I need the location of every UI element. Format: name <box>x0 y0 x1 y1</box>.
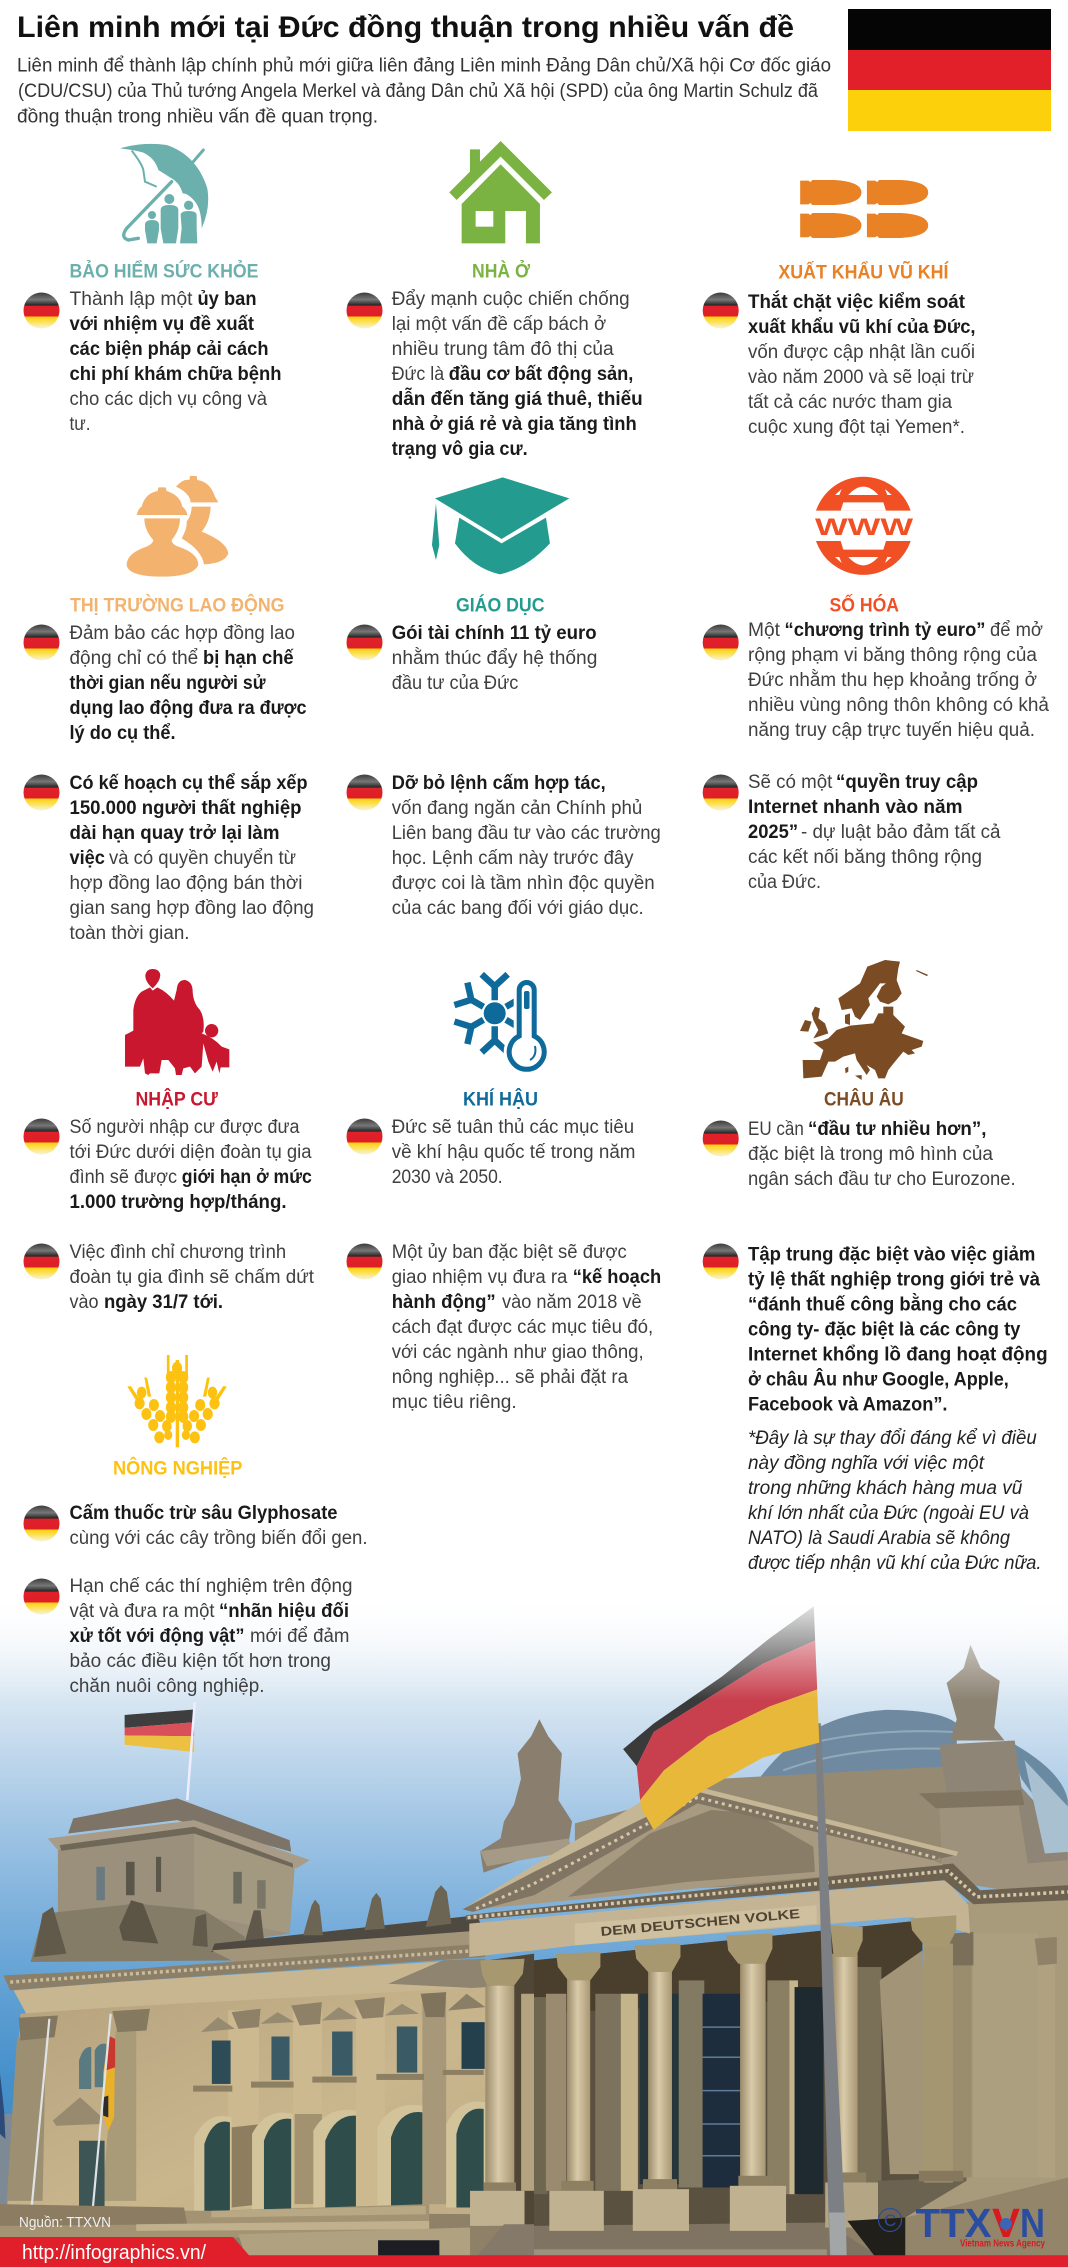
left tower and wing <box>0 1798 534 2256</box>
panel: housing <box>346 141 643 460</box>
icon: family silhouette <box>125 969 229 1075</box>
title: Liên minh mới tại Đức đồng thuận trong nhiều vấn đề <box>17 11 794 44</box>
text block: Cấm thuốc trừ sâu Glyphosate <box>70 1503 338 1524</box>
text block: thời gian nếu người sử <box>70 673 266 694</box>
icon: flag bullet <box>346 1118 382 1154</box>
text block <box>70 1503 368 1549</box>
text block <box>392 773 661 919</box>
footer bar: http://infographics.vn/ <box>22 2242 206 2264</box>
text block <box>748 772 1001 893</box>
bullet item <box>24 623 307 744</box>
icon: flag bullet <box>703 774 739 810</box>
text block: Đức nhằm thu hẹp khoảng trống ở <box>748 669 1037 691</box>
text block: nông nghiệp... sẽ phải đặt ra <box>392 1367 628 1388</box>
text block: 150.000 người thất nghiệp <box>70 798 302 819</box>
text block: “đánh thuế công bằng cho các <box>748 1294 1017 1316</box>
text block: ở châu Âu như Google, Apple, <box>748 1368 1009 1390</box>
text block: dẫn đến tăng giá thuê, thiếu <box>392 388 643 410</box>
footnote: khí lớn nhất của Đức (ngoài EU và <box>748 1503 1029 1524</box>
text block: Sẽ có một <box>748 772 833 793</box>
text block: ngân sách đầu tư cho Eurozone. <box>748 1169 1016 1190</box>
source: Nguồn: TTXVN <box>19 2214 111 2231</box>
text block: “chương trình tỷ euro” <box>784 620 986 641</box>
text block: Internet nhanh vào năm <box>748 797 962 818</box>
icon: graduation cap <box>432 477 569 574</box>
text block: hợp đồng lao động bán thời <box>70 873 302 894</box>
text block <box>392 289 643 460</box>
heading: NHẬP CƯ <box>136 1088 218 1110</box>
panel: climate <box>346 974 661 1413</box>
text block: tới Đức dưới diện đoàn tụ gia <box>70 1142 312 1163</box>
heading: THỊ TRƯỜNG LAO ĐỘNG <box>70 594 284 616</box>
icon: workers <box>127 476 228 577</box>
text block: chi phí khám chữa bệnh <box>70 364 282 385</box>
logo: TTXVN <box>878 2200 1045 2250</box>
bullet item <box>703 1244 1048 1416</box>
text block <box>70 772 314 944</box>
logo: TTXVN: TTX <box>916 2200 992 2246</box>
text block <box>392 623 597 694</box>
icon: flag bullet <box>703 292 739 328</box>
bullet item <box>24 772 314 944</box>
text block: Một <box>748 620 781 641</box>
icon: www globe <box>815 477 913 575</box>
text block: đình sẽ được <box>70 1167 177 1188</box>
logo: TTXVN: C <box>884 2211 896 2230</box>
panel: agriculture <box>24 1355 368 1697</box>
icon: flag bullet <box>24 774 60 810</box>
text block: đầu cơ bất động sản, <box>449 364 633 385</box>
text block: công ty- đặc biệt là các công ty <box>748 1320 1021 1340</box>
text block: Internet khổng lồ đang hoạt động <box>748 1344 1048 1366</box>
text block: xuất khẩu vũ khí của Đức, <box>748 317 976 338</box>
icon: flag bullet <box>24 1578 60 1614</box>
panel: immigration <box>24 969 315 1313</box>
text block: 2030 và 2050. <box>392 1167 503 1188</box>
icon: bullets <box>800 180 928 238</box>
text block: 1.000 trường hợp/tháng. <box>70 1192 286 1213</box>
text block <box>748 620 1049 741</box>
footnote: trong những khách hàng mua vũ <box>748 1478 1023 1499</box>
text block: bị hạn chế <box>203 648 294 669</box>
text block: Facebook và Amazon”. <box>748 1394 948 1416</box>
text block: để mở <box>990 620 1043 641</box>
text block: Dỡ bỏ lệnh cấm hợp tác, <box>392 773 606 794</box>
text block: Tập trung đặc biệt vào việc giảm <box>748 1244 1035 1266</box>
heading: KHÍ HẬU <box>463 1088 538 1110</box>
text block: dụng lao động đưa ra được <box>70 698 307 719</box>
background photo: Reichstag building <box>0 1590 1068 2267</box>
text block: lý do cụ thể. <box>70 723 176 744</box>
icon: wheat <box>127 1355 227 1447</box>
text block: Một ủy ban đặc biệt sẽ được <box>392 1242 627 1263</box>
bullet item <box>703 1119 1016 1190</box>
icon: snowflake and thermometer <box>454 974 544 1069</box>
bullet item <box>346 289 643 460</box>
text block: bảo các điều kiện tốt hơn trong <box>70 1651 331 1672</box>
text block: hành động” <box>392 1292 496 1313</box>
icon: flag bullet <box>24 1506 60 1542</box>
heading: NHÀ Ở <box>472 260 531 282</box>
text block: Đức sẽ tuân thủ các mục tiêu <box>392 1117 634 1138</box>
footnote: được tiếp nhận vũ khí của Đức nữa. <box>748 1553 1042 1574</box>
footnote: *Đây là sự thay đổi đáng kể vì điều <box>748 1428 1037 1449</box>
text block <box>748 1119 1016 1190</box>
text block: tư. <box>70 414 90 435</box>
text block: của Đức. <box>748 872 821 893</box>
bullet item <box>346 773 661 919</box>
bullet item <box>346 1117 636 1188</box>
bullet item <box>346 1242 661 1413</box>
text block: của các bang đối với giáo dục. <box>392 898 644 919</box>
panel: health insurance <box>24 144 282 435</box>
text block: “kế hoạch <box>573 1267 661 1288</box>
text block: và có quyền chuyển từ <box>109 848 296 869</box>
intro paragraph <box>17 56 831 128</box>
icon: www globe: WWW <box>815 514 913 541</box>
heading: NÔNG NGHIỆP <box>113 1458 243 1480</box>
flags <box>125 1606 819 1830</box>
text block: Việc đình chỉ chương trình <box>70 1242 286 1263</box>
text block: với nhiệm vụ đề xuất <box>70 314 255 335</box>
text block: ủy ban <box>198 289 256 310</box>
text block: về khí hậu quốc tế trong năm <box>392 1142 636 1163</box>
text block: nhiều vùng nông thôn không có khả <box>748 695 1049 716</box>
text block: đặc biệt là trong mô hình của <box>748 1144 993 1165</box>
intro paragraph: Liên minh để thành lập chính phủ mới giữa liên đảng Liên minh Đảng Dân chủ/Xã hội Cơ đốc giáo <box>17 56 831 76</box>
panel: arms exports <box>703 180 976 438</box>
text block: mục tiêu riêng. <box>392 1392 517 1413</box>
text block: Hạn chế các thí nghiệm trên động <box>70 1576 352 1597</box>
text block: Đảm bảo các hợp đồng lao <box>70 623 295 644</box>
text block: nhằm thúc đẩy hệ thống <box>392 647 597 669</box>
footer bar <box>0 2237 1068 2267</box>
bullet item <box>24 1503 368 1549</box>
bullet item <box>703 620 1049 741</box>
text block <box>70 1242 315 1313</box>
icon: flag bullet <box>346 774 382 810</box>
bullet item <box>346 623 597 694</box>
text block: động chỉ có thể <box>70 648 198 669</box>
icon: flag bullet <box>346 624 382 660</box>
text block: tỷ lệ thất nghiệp trong giới trẻ và <box>748 1270 1040 1290</box>
heading: CHÂU ÂU <box>824 1088 904 1110</box>
text block: được coi là tầm nhìn độc quyền <box>392 873 655 894</box>
text block: xử tốt với động vật” <box>70 1626 244 1647</box>
text block <box>70 1117 312 1213</box>
text block <box>748 291 976 438</box>
footnote: này đồng nghĩa với việc một <box>748 1453 985 1474</box>
inscription on the building: DEM DEUTSCHEN VOLKE <box>600 1906 801 1939</box>
text block: Thắt chặt việc kiểm soát <box>748 291 966 313</box>
text block: - dự luật bảo đảm tất cả <box>801 822 1001 843</box>
bullet item <box>24 1576 352 1697</box>
text block: cuộc xung đột tại Yemen*. <box>748 417 965 438</box>
text block: năng truy cập trực tuyến hiệu quả. <box>748 720 1035 741</box>
text block: Đẩy mạnh cuộc chiến chống <box>392 289 630 310</box>
logo: TTXVN: Vietnam News Agency <box>960 2238 1045 2250</box>
text block: “quyền truy cập <box>836 772 978 793</box>
icon: flag bullet <box>703 1244 739 1280</box>
icon: flag bullet <box>703 1120 739 1156</box>
bullet item <box>24 1117 312 1213</box>
text block: Đức là <box>392 364 444 385</box>
text block: cho các dịch vụ công và <box>70 389 267 410</box>
text block <box>392 1117 636 1188</box>
panel: Europe <box>703 960 1048 1574</box>
text block: Gói tài chính 11 tỷ euro <box>392 623 597 644</box>
panel: education <box>346 477 661 919</box>
dome, turrets <box>480 1645 1068 1873</box>
text block <box>748 1244 1048 1416</box>
text block: “đầu tư nhiều hơn”, <box>808 1119 986 1140</box>
portico <box>462 1723 1068 2256</box>
text block: học. Lệnh cấm này trước đây <box>392 848 634 869</box>
text block: đầu tư của Đức <box>392 673 518 694</box>
text block: Thành lập một <box>70 289 193 310</box>
icon: flag bullet <box>346 1244 382 1280</box>
text block: giới hạn ở mức <box>182 1167 312 1188</box>
icon: umbrella and family <box>120 144 208 243</box>
text block: EU cần <box>748 1119 804 1140</box>
stone base behind the lower building <box>0 2205 1068 2256</box>
text block: rộng phạm vi băng thông rộng của <box>748 645 1037 666</box>
bullet item <box>24 1242 315 1313</box>
icon: flag bullet <box>24 1118 60 1154</box>
icon: flag bullet <box>346 292 382 328</box>
text block: mới để đảm <box>250 1626 349 1647</box>
text block: ngày 31/7 tới. <box>104 1292 223 1313</box>
icon: flag bullet <box>24 292 60 328</box>
text block: toàn thời gian. <box>70 923 190 944</box>
text block: vật và đưa ra một <box>70 1601 215 1622</box>
text block: “nhãn hiệu đối <box>219 1601 349 1622</box>
bullet item <box>703 291 976 438</box>
text block: nhà ở giá rẻ và gia tăng tình <box>392 414 637 435</box>
heading: SỐ HÓA <box>830 594 899 616</box>
text block: cùng với các cây trồng biến đổi gen. <box>70 1528 368 1549</box>
text block: vào năm 2000 và sẽ loại trừ <box>748 367 974 388</box>
bullet item <box>703 772 1001 893</box>
text block: chăn nuôi công nghiệp. <box>70 1676 264 1697</box>
icon: house <box>449 141 552 243</box>
text block: các kết nối băng thông rộng <box>748 847 982 868</box>
text block: Có kế hoạch cụ thể sắp xếp <box>70 772 308 794</box>
icon: German flag <box>848 9 1051 131</box>
text block: các biện pháp cải cách <box>70 339 268 360</box>
text block: Số người nhập cư được đưa <box>70 1117 300 1138</box>
text block: Liên bang đầu tư vào các trường <box>392 823 661 844</box>
text block: giao nhiệm vụ đưa ra <box>392 1267 568 1288</box>
icon: flag bullet <box>24 1244 60 1280</box>
text block: việc <box>70 848 105 869</box>
heading: GIÁO DỤC <box>456 594 545 616</box>
icon: map of Europe <box>800 960 928 1080</box>
text block <box>70 1576 352 1697</box>
text block: đoàn tụ gia đình sẽ chấm dứt <box>70 1267 315 1288</box>
icon: flag bullet <box>703 624 739 660</box>
logo: TTXVN: N <box>1020 2200 1045 2246</box>
text block: 2025” <box>748 822 798 843</box>
bullet item <box>24 289 282 435</box>
text block: vào năm 2018 về <box>502 1292 642 1313</box>
text block: lại một vấn đề cấp bách ở <box>392 314 606 335</box>
text block: vốn đang ngăn cản Chính phủ <box>392 798 642 819</box>
intro paragraph: (CDU/CSU) của Thủ tướng Angela Merkel và đảng Dân chủ Xã hội (SPD) của ông Martin Schulz đã <box>18 81 818 102</box>
footnote: NATO) là Saudi Arabia sẽ không <box>748 1528 1010 1549</box>
icon: flag bullet <box>24 624 60 660</box>
intro paragraph: đồng thuận trong nhiều vấn đề quan trọng. <box>17 106 378 128</box>
text block: dài hạn quay trở lại làm <box>70 823 280 844</box>
text block: tất cả các nước tham gia <box>748 392 952 413</box>
text block: với các ngành như giao thông, <box>392 1342 644 1363</box>
text block: vốn được cập nhật lần cuối <box>748 342 975 363</box>
text block: nhiều trung tâm đô thị của <box>392 339 614 360</box>
logo: TTXVN: V <box>992 2200 1021 2246</box>
text block <box>70 289 282 435</box>
text block: cách đạt được các mục tiêu đó, <box>392 1317 653 1338</box>
text block <box>392 1242 661 1413</box>
text block: trạng vô gia cư. <box>392 439 528 460</box>
heading: XUẤT KHẨU VŨ KHÍ <box>778 262 949 284</box>
footnote <box>748 1428 1042 1574</box>
text block <box>70 623 307 744</box>
panel: labour market <box>24 476 314 944</box>
text block: gian sang hợp đồng lao động <box>70 898 314 919</box>
panel: digitalisation <box>703 477 1049 893</box>
text block: vào <box>70 1292 98 1313</box>
heading: BẢO HIỂM SỨC KHỎE <box>70 260 258 282</box>
